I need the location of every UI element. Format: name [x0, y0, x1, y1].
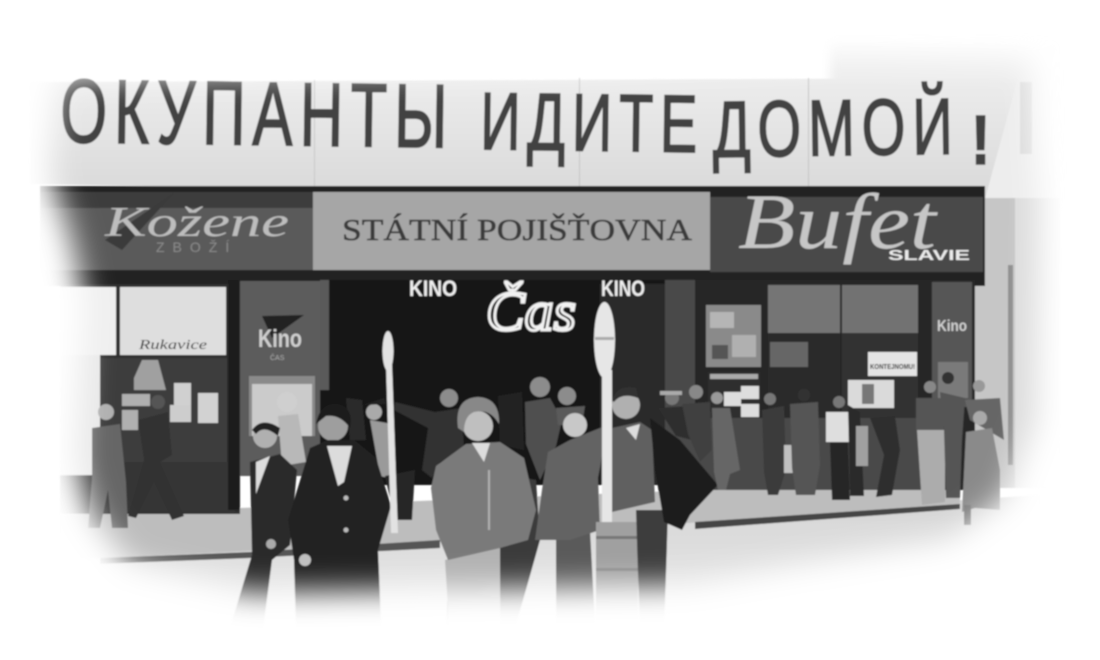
people by the notices: [658, 385, 740, 490]
photograph: street scene with vignette: [40, 54, 1050, 616]
insurance sign: [313, 192, 710, 270]
banner slogan: [62, 78, 986, 175]
men behind curly woman: [498, 377, 585, 480]
kino lettering right: KINO: [601, 276, 645, 301]
insurance sign: STÁTNÍ POJIŠŤOVNA: [342, 212, 693, 247]
buffet sign: SLAVIE: [888, 247, 970, 264]
blonde woman: [278, 414, 307, 466]
draped black coat: [650, 418, 718, 530]
buffet sign: [710, 191, 984, 272]
banner slogan: ИДИТЕ: [480, 76, 698, 169]
upper wall: [830, 40, 1060, 488]
banner slogan: ОКУПАНТЫ: [60, 62, 448, 167]
cinema entrance: [320, 276, 695, 485]
woman with curly hair: [431, 397, 540, 640]
right road sign: [594, 302, 615, 522]
neon cas sign: Čas: [486, 281, 576, 343]
left shopfront: [60, 284, 240, 514]
men at right: [916, 372, 1004, 505]
right shopfront: [695, 280, 975, 490]
man holding cigarette: [611, 394, 668, 610]
woman seen from behind: [534, 412, 602, 610]
banner: [42, 78, 1002, 196]
protest notice: [868, 352, 917, 376]
cinema pillar: ČAS: [270, 353, 285, 362]
queue by the buffet: [762, 389, 900, 500]
buffet window: [768, 285, 840, 333]
hat man: [346, 398, 415, 520]
woman in dark coat: [265, 411, 391, 616]
gloves blind: [120, 287, 226, 355]
walking man: [128, 395, 184, 520]
person in long coat: [962, 411, 1000, 525]
man with outstretched arm: [394, 389, 464, 478]
cinema pillar: Kino: [258, 325, 302, 353]
leather goods sign: Kožene: [104, 200, 289, 246]
kino lettering left: KINO: [409, 276, 457, 301]
leather goods sign: ZBOŽÍ: [156, 239, 237, 255]
sidewalk: [76, 489, 961, 564]
leather goods sign: [40, 192, 313, 270]
banner slogan: !: [971, 101, 990, 179]
left road sign pole: [382, 331, 398, 533]
man in suit: [236, 422, 298, 616]
protest notice: KONTEJNOMU!: [870, 364, 915, 371]
pedestrian far left: [88, 404, 128, 528]
notice collage: [706, 305, 761, 367]
buffet sign: Bufet: [738, 178, 939, 265]
cinema pillar: [228, 280, 320, 510]
road: [122, 497, 1017, 602]
right shopfront: Kino: [937, 318, 967, 335]
barrel: [595, 521, 639, 604]
banner slogan: ДОМОЙ: [712, 82, 953, 174]
gloves blind: Rukavice: [138, 338, 207, 353]
fascia band: [40, 178, 985, 286]
small cinema panel: [932, 282, 972, 407]
